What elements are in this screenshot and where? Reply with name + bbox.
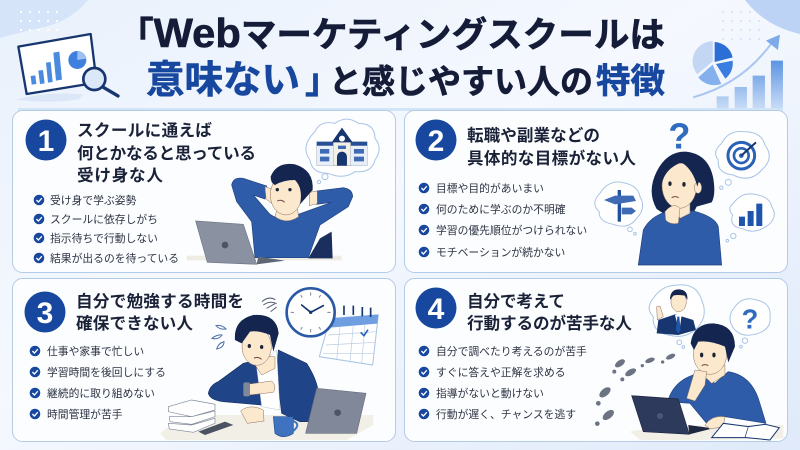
checklist 3	[30, 344, 166, 421]
panel 4: not good at acting independently	[404, 278, 788, 442]
number badge 3: 3	[37, 297, 53, 330]
checklist 2: 学習の優先順位がつけられない	[436, 223, 587, 237]
illustration: relaxed man with laptop and school thought	[187, 119, 379, 264]
checklist 1: スクールに依存しがち	[50, 212, 158, 226]
title	[118, 10, 665, 102]
number badge 3	[24, 292, 66, 332]
heading 1: 受け身な人	[77, 166, 163, 185]
illustration: stressed man checking watch with clock and calendar	[160, 288, 378, 440]
panel 2: no concrete goal	[404, 110, 788, 272]
checklist 1	[34, 193, 179, 265]
heading 4: 自分で考えて	[467, 291, 565, 311]
title: 特徴	[596, 63, 665, 101]
checklist 3: 学習時間を後回しにする	[47, 365, 166, 379]
heading 2: 転職や副業などの	[467, 126, 600, 145]
checklist 2: 目標や目的があいまい	[436, 181, 544, 195]
checklist 2: モチベーションが続かない	[436, 245, 565, 259]
icon: laptop analytics with magnifier	[16, 34, 118, 102]
heading 3: 確保できない人	[76, 314, 193, 333]
checklist 4	[419, 344, 587, 421]
checklist 1: 結果が出るのを待っている	[50, 251, 179, 265]
heading 4: 行動するのが苦手な人	[467, 313, 632, 333]
checklist 4: 自分で調べたり考えるのが苦手	[436, 344, 587, 358]
title: 」	[305, 62, 340, 101]
checklist 3: 継続的に取り組めない	[47, 386, 155, 400]
checklist 2: 何のために学ぶのか不明確	[436, 202, 566, 216]
number badge 2: 2	[428, 125, 444, 158]
number badge 4	[416, 288, 456, 328]
checklist 3: 時間管理が苦手	[47, 407, 123, 421]
illustration: puzzled woman with thoughts: ?	[668, 115, 690, 156]
number badge 4: 4	[428, 293, 445, 326]
number badge 2	[416, 120, 456, 160]
heading 2: 具体的な目標がない人	[467, 148, 636, 168]
heading 3: 自分で勉強する時間を	[76, 291, 244, 311]
checklist 2	[419, 181, 587, 259]
checklist 1: 受け身で学ぶ姿勢	[50, 193, 137, 207]
title: 意味ない	[146, 59, 300, 102]
checklist 4: 行動が遅く、チャンスを逃す	[436, 407, 576, 421]
panel 1: passive learner	[12, 110, 396, 272]
checklist 1: 指示待ちで行動しない	[50, 231, 158, 245]
checklist 3: 仕事や家事で忙しい	[47, 344, 144, 358]
checklist 4: すぐに答えや正解を求める	[436, 365, 566, 379]
title: 「Webマーケティングスクールは	[118, 10, 665, 56]
illustration: thinking man with laptop, clouds and footprints	[595, 285, 783, 440]
panel 3: no time to study	[12, 278, 396, 442]
number badge 1	[26, 120, 66, 160]
illustration: puzzled woman with thoughts	[595, 115, 774, 265]
illustration: thinking man with laptop, clouds and footprints: ?	[742, 303, 758, 334]
title: と感じやすい人の	[329, 63, 593, 100]
number badge 1: 1	[38, 125, 54, 158]
icon: pie chart and rising bars	[693, 35, 783, 108]
checklist 4: 指導がないと動けない	[436, 386, 544, 400]
heading 1: スクールに通えば	[77, 121, 212, 140]
heading 1: 何とかなると思っている	[77, 144, 256, 163]
